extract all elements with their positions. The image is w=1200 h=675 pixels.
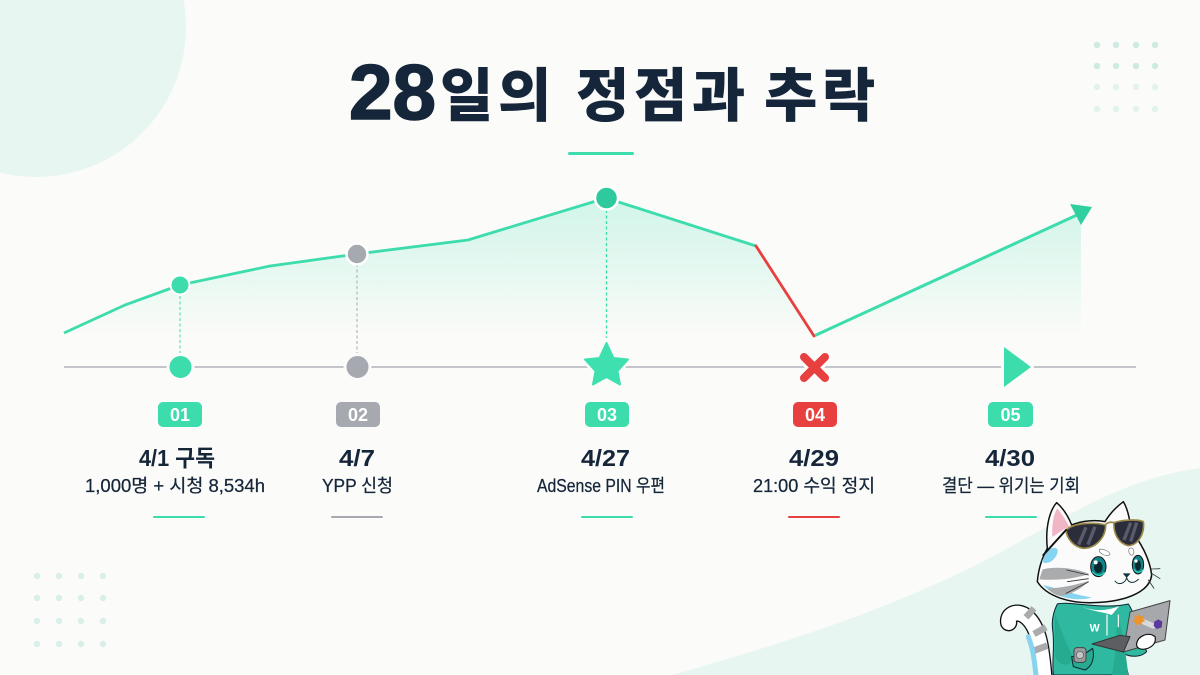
- marker 04: cross: [804, 357, 825, 378]
- tail: [1009, 608, 1047, 675]
- forehead marks: [1099, 548, 1134, 556]
- title: 추락: [764, 49, 880, 133]
- head: [1037, 502, 1152, 603]
- underline 04: [788, 516, 840, 518]
- item 05: [942, 402, 1080, 518]
- marker 05: play: [1004, 347, 1031, 387]
- sunglasses: [1043, 520, 1144, 555]
- paw on laptop: [1137, 634, 1155, 649]
- detail 05: 결단 — 위기는 기회: [942, 476, 1080, 496]
- hood opening: [1077, 604, 1119, 615]
- eyes: [1091, 555, 1144, 577]
- underline 05: [985, 516, 1037, 518]
- nose: [1123, 574, 1130, 577]
- title: [349, 48, 880, 136]
- timeline axis: [64, 366, 1136, 368]
- laptop: [1092, 601, 1170, 652]
- green recovery line: [815, 214, 1078, 336]
- hoodie: [1052, 603, 1147, 675]
- detail 01: 1,000명 + 시청 8,534h: [85, 476, 265, 496]
- head blue patches: [1042, 548, 1092, 599]
- title: 28: [349, 48, 436, 136]
- title: 정점과: [576, 49, 750, 133]
- ear pink: [1052, 508, 1069, 537]
- date 03: 4/27: [581, 445, 630, 471]
- underline 02: [331, 516, 383, 518]
- item 01: [85, 402, 265, 518]
- whiskers: [1066, 569, 1160, 593]
- mascot: cat with sunglasses and laptop: [1009, 502, 1170, 675]
- decor: top-left circle: [0, 0, 186, 177]
- dotted connector 02: [356, 264, 358, 354]
- area fill under line: [64, 198, 1081, 340]
- badge 01: 01: [170, 405, 190, 425]
- underline 03: [581, 516, 633, 518]
- marker 01: [168, 354, 193, 380]
- arrow head: [1070, 204, 1092, 225]
- decor: bottom-right wave: [672, 468, 1200, 675]
- dotted connector 01: [179, 296, 181, 354]
- hoodie logo: W: [1090, 623, 1101, 635]
- badge 03: 03: [597, 405, 617, 425]
- underline 01: [153, 516, 205, 518]
- title: 일의: [440, 49, 556, 133]
- chart: revenue trend line: [64, 186, 1092, 354]
- item 03: [537, 402, 665, 518]
- point 02: [346, 244, 368, 264]
- badge 02: 02: [348, 405, 368, 425]
- hoodie shade: [1055, 613, 1128, 675]
- mouth: [1115, 578, 1138, 584]
- decor: bottom-left dots: [34, 573, 106, 647]
- drawstrings: [1107, 615, 1118, 635]
- point 03: [595, 186, 618, 210]
- dotted connector 03: [606, 210, 608, 338]
- item 02: [322, 402, 393, 518]
- date 01: 4/1 구독: [139, 445, 215, 471]
- detail 04: 21:00 수익 정지: [753, 476, 875, 496]
- decor: top-right dots: [1094, 42, 1158, 112]
- detail 02: YPP 신청: [322, 476, 393, 496]
- badge 05: 05: [1000, 405, 1021, 425]
- pocket and watch: [1072, 648, 1093, 670]
- head grey stripes: [1039, 568, 1089, 596]
- badge 04: 04: [805, 405, 825, 425]
- date 04: 4/29: [789, 445, 839, 471]
- item 04: [753, 402, 875, 518]
- detail 03: AdSense PIN 우편: [537, 476, 665, 496]
- date 02: 4/7: [339, 445, 375, 471]
- point 01: [170, 276, 190, 294]
- badge 01: [158, 402, 202, 427]
- green rising line: [64, 198, 756, 333]
- title underline: [568, 152, 634, 155]
- red fall line: [756, 246, 814, 336]
- marker 03: star: [585, 343, 628, 384]
- marker 02: [345, 354, 370, 380]
- date 05: 4/30: [985, 445, 1035, 471]
